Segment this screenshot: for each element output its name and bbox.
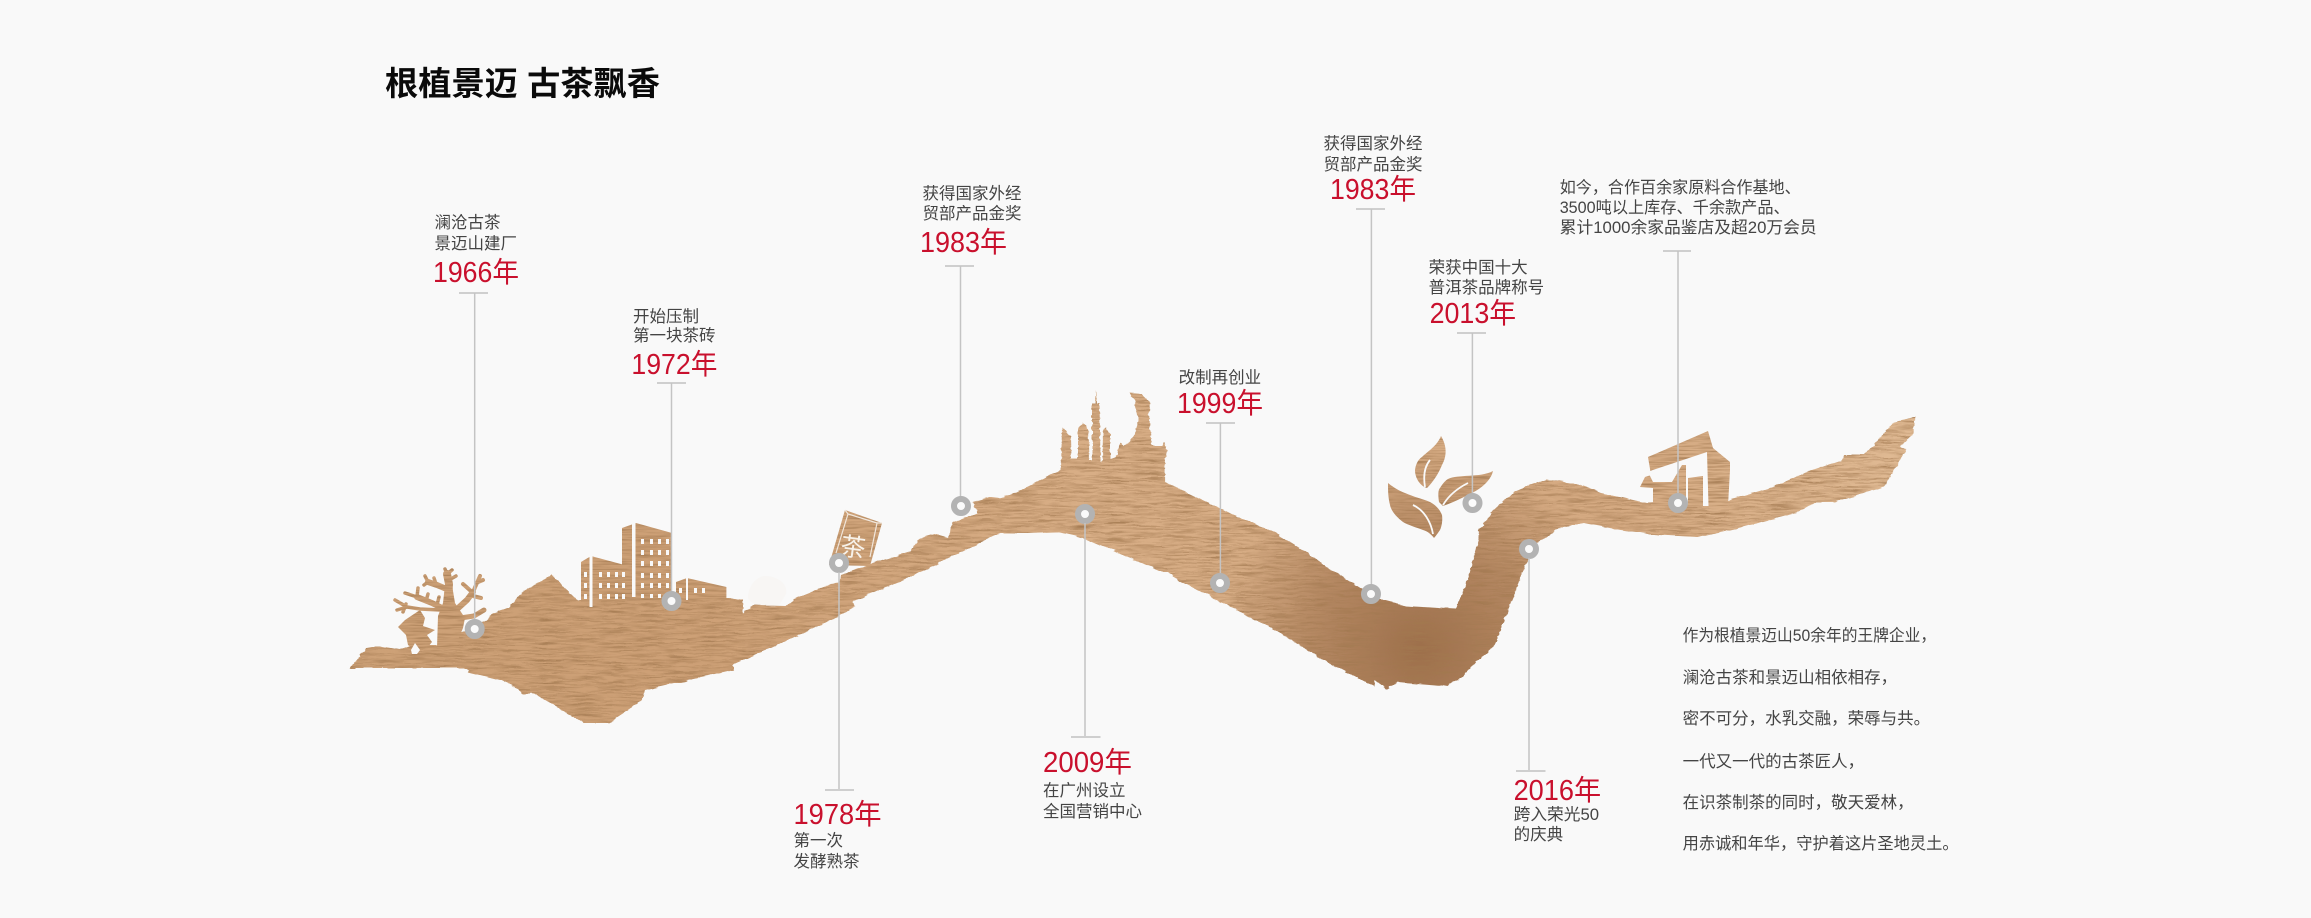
- milestone: 1978: 发酵熟茶: [794, 852, 860, 871]
- milestone: 2009: 在广州设立: [1043, 781, 1126, 800]
- text block: brand story: 一代又一代的古茶匠人，: [1683, 752, 1864, 771]
- icon: house: [1640, 431, 1730, 506]
- milestone: 2016: 2016年: [1514, 775, 1601, 807]
- milestone: 2009: [1043, 507, 1142, 821]
- title: 根植景迈 古茶飘香: [385, 65, 660, 102]
- river mountain silhouette: [350, 389, 1915, 723]
- milestone: 1972: [631, 307, 717, 608]
- milestone: 1983 export award: [920, 184, 1022, 513]
- milestone: 2016: 的庆典: [1514, 825, 1563, 844]
- milestone: 2016: 跨入荣光50: [1514, 805, 1599, 824]
- icon: tea leaves: [1388, 436, 1493, 538]
- milestone: 2016: [1514, 542, 1601, 844]
- milestone: 2009: 2009年: [1043, 747, 1132, 779]
- milestone: today: 如今，合作百余家原料合作基地、: [1560, 178, 1801, 197]
- milestone: today: [1560, 178, 1817, 510]
- milestone: 1999: [1177, 368, 1263, 590]
- milestone: 1999: 1999年: [1177, 388, 1263, 420]
- text block: brand story: 密不可分，水乳交融，荣辱与共。: [1683, 709, 1930, 728]
- milestone: 2013: [1429, 258, 1544, 510]
- milestone: 2009: 全国营销中心: [1043, 802, 1142, 821]
- milestone: 2013: 2013年: [1430, 298, 1516, 330]
- milestone: 1966: 景迈山建厂: [434, 234, 517, 253]
- icon: ancient tea tree: [395, 569, 484, 654]
- milestone: 1978: [794, 556, 882, 871]
- milestone: 1972: 第一块茶砖: [633, 326, 716, 345]
- icon: tea brick box: [829, 510, 882, 566]
- milestone: 1966: 1966年: [433, 257, 519, 289]
- milestone: 1983 second label: 1983年: [1330, 174, 1416, 206]
- icon: city buildings: [581, 520, 726, 607]
- icon: faint tea cup: [748, 576, 786, 606]
- text block: brand story: 用赤诚和年华，守护着这片圣地灵土。: [1683, 834, 1959, 853]
- milestone: today: 累计1000余家品鉴店及超20万会员: [1560, 218, 1817, 237]
- milestone: 1978: 1978年: [794, 799, 882, 831]
- milestone: 1966: [433, 213, 519, 636]
- milestone: 1972: 开始压制: [633, 307, 699, 326]
- milestone: 1983 second label: [1324, 134, 1422, 601]
- milestone: 1972: 1972年: [631, 349, 717, 381]
- milestone: 1983 second label: 获得国家外经: [1324, 134, 1422, 153]
- milestone: 1983 export award: 获得国家外经: [922, 184, 1022, 203]
- text block: brand story: 在识茶制茶的同时，敬天爱林，: [1683, 793, 1914, 812]
- milestone: 1999: 改制再创业: [1179, 368, 1261, 387]
- icon: tea brick box: 茶: [839, 532, 867, 564]
- milestone: 2013: 荣获中国十大: [1429, 258, 1528, 277]
- milestone: 1983 export award: 贸部产品金奖: [922, 204, 1022, 223]
- milestone: 1983 export award: 1983年: [920, 227, 1007, 259]
- milestone: 2013: 普洱茶品牌称号: [1429, 278, 1544, 297]
- milestone: 1966: 澜沧古茶: [434, 213, 500, 232]
- text block: brand story: 作为根植景迈山50余年的王牌企业，: [1683, 626, 1936, 645]
- text block: brand story: 澜沧古茶和景迈山相依相存，: [1683, 668, 1897, 687]
- milestone: 1983 second label: 贸部产品金奖: [1324, 155, 1422, 174]
- milestone: 1978: 第一次: [794, 831, 843, 850]
- milestone: today: 3500吨以上库存、千余款产品、: [1560, 198, 1790, 217]
- text block: brand story: [1683, 626, 1959, 853]
